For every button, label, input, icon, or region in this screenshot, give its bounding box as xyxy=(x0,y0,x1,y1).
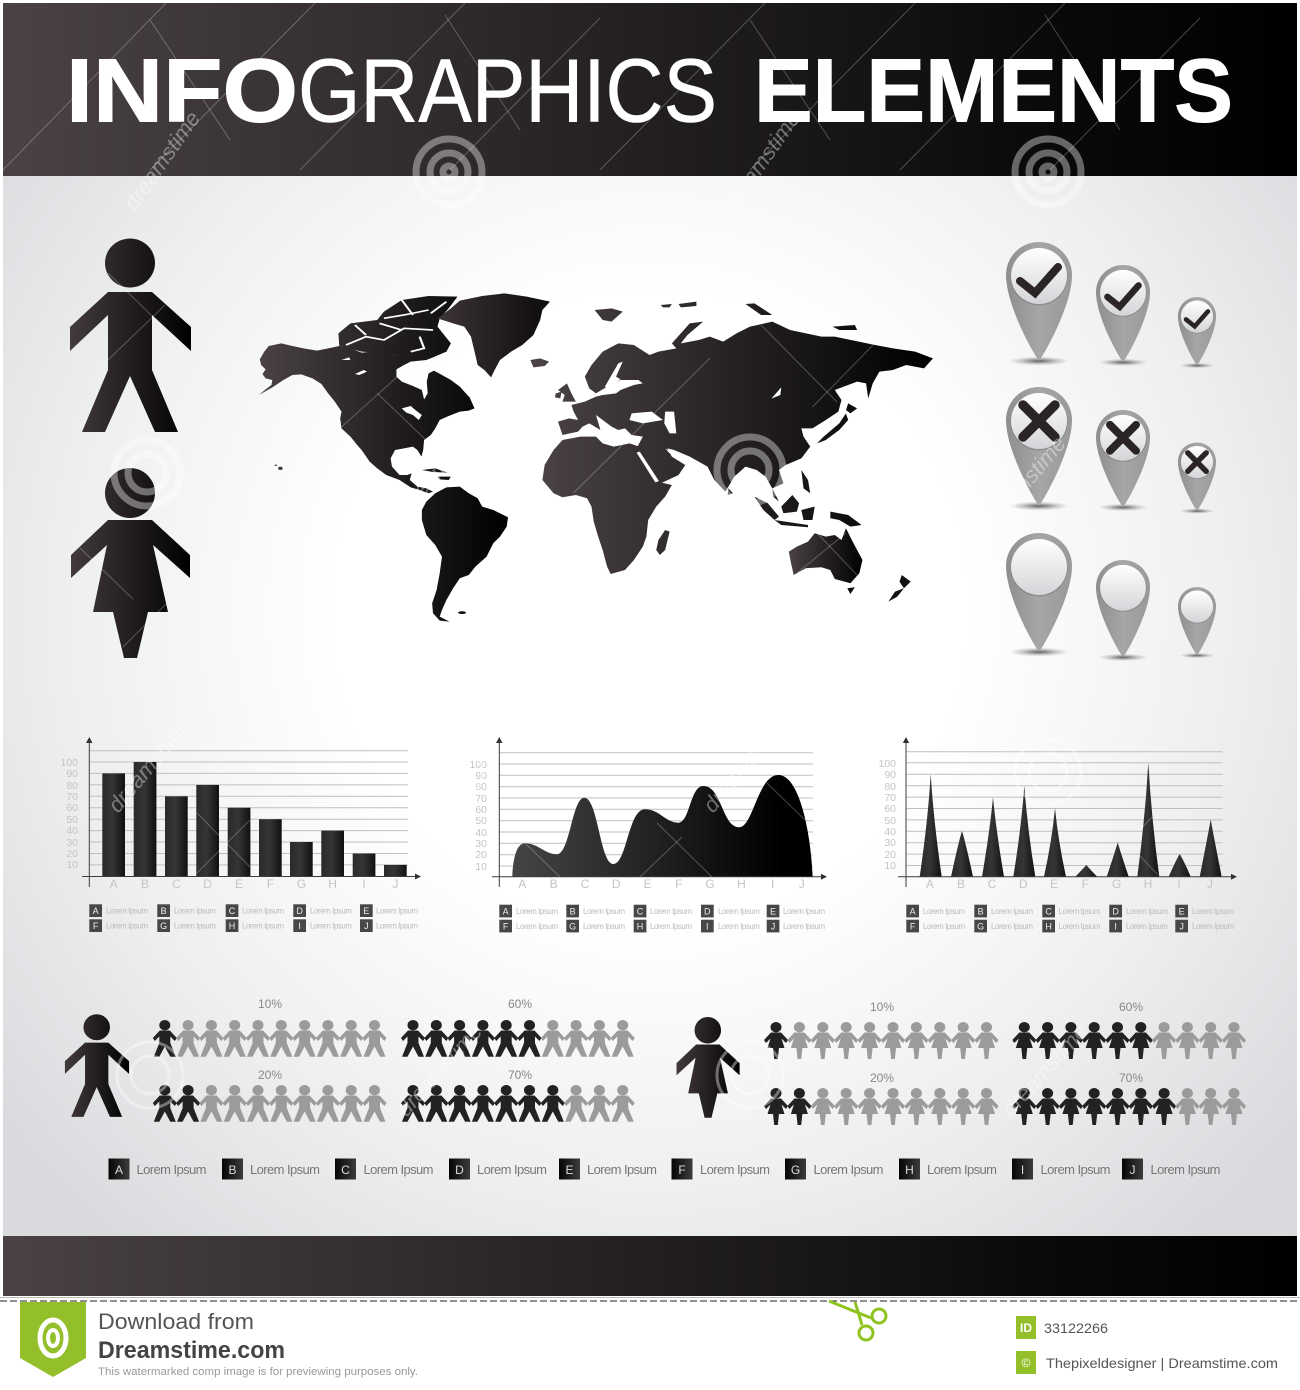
icon: small blank pin xyxy=(1178,587,1216,658)
x axis labels: C xyxy=(988,877,997,891)
map pins: check row xyxy=(1006,242,1216,368)
y axis labels: 30 xyxy=(66,837,78,849)
bars xyxy=(102,762,407,876)
x axis labels: E xyxy=(643,877,652,891)
image author xyxy=(1016,1351,1278,1374)
x axis labels: B xyxy=(141,877,149,891)
chart legend: Lorem Ipsum xyxy=(1192,922,1234,931)
chart legend: Lorem Ipsum xyxy=(516,907,558,916)
y axis labels: 40 xyxy=(475,827,487,839)
y axis labels: 50 xyxy=(884,815,896,827)
chart legend: Lorem Ipsum xyxy=(991,907,1033,916)
chart legend: Lorem Ipsum xyxy=(516,922,558,931)
world map xyxy=(259,293,933,622)
chart legend: F xyxy=(910,922,916,932)
axes xyxy=(492,737,827,887)
x axis labels: H xyxy=(737,877,746,891)
footer download text xyxy=(98,1309,418,1378)
x axis labels: E xyxy=(235,877,243,891)
chart legend: F xyxy=(503,922,509,932)
people row: men 20% xyxy=(153,1068,386,1122)
bottom legend xyxy=(108,1158,1220,1180)
icon: large check pin xyxy=(1006,242,1072,366)
chart legend: E xyxy=(770,906,776,916)
watermark diagonal lines xyxy=(3,3,1200,877)
x axis labels: B xyxy=(957,877,965,891)
x axis labels: D xyxy=(612,877,621,891)
y axis labels xyxy=(60,757,78,871)
chart legend: C xyxy=(637,906,644,916)
bottom legend: Lorem Ipsum xyxy=(250,1162,320,1177)
people row: women 10%: 10% xyxy=(870,1000,894,1014)
chart legend: Lorem Ipsum xyxy=(1192,907,1234,916)
image id xyxy=(1016,1316,1108,1339)
icon: large man xyxy=(70,238,191,432)
x axis labels xyxy=(518,877,805,891)
image id: ID xyxy=(1020,1321,1032,1335)
y axis labels: 20 xyxy=(475,849,487,861)
chart legend: Lorem Ipsum xyxy=(650,907,692,916)
chart legend: J xyxy=(364,921,369,931)
y axis labels: 60 xyxy=(475,804,487,816)
axes xyxy=(82,737,421,887)
y axis labels: 10 xyxy=(475,861,487,873)
icon: medium blank pin xyxy=(1096,560,1150,661)
canadian arctic channels xyxy=(346,300,446,352)
chart legend: Lorem Ipsum xyxy=(583,922,625,931)
x axis labels: A xyxy=(110,877,118,891)
bottom legend: G xyxy=(791,1163,800,1177)
chart legend: I xyxy=(298,921,301,931)
watermark spirals xyxy=(114,139,1081,1108)
chart legend: G xyxy=(977,922,984,932)
watermark text: dreamstime xyxy=(997,1019,1092,1121)
image id: 33122266 xyxy=(1044,1320,1108,1336)
axes xyxy=(898,737,1237,887)
chart legend: Lorem Ipsum xyxy=(106,906,148,916)
chart legend: I xyxy=(1114,922,1117,932)
chart legend: Lorem Ipsum xyxy=(174,906,216,916)
chart legend: H xyxy=(229,921,235,931)
bottom legend: B xyxy=(228,1163,237,1177)
y axis labels: 100 xyxy=(469,759,487,771)
bottom legend: Lorem Ipsum xyxy=(587,1162,657,1177)
chart legend xyxy=(906,905,1234,932)
chart legend: G xyxy=(160,921,167,931)
x axis labels: F xyxy=(267,877,274,891)
chart legend: D xyxy=(1112,906,1119,916)
y axis labels: 40 xyxy=(66,825,78,837)
y axis labels: 60 xyxy=(66,802,78,814)
chart legend: F xyxy=(93,921,99,931)
bottom legend: E xyxy=(565,1163,574,1177)
x axis labels: G xyxy=(1112,877,1121,891)
chart legend: Lorem Ipsum xyxy=(174,922,216,930)
chart legend: E xyxy=(1179,906,1185,916)
y axis labels: 80 xyxy=(66,780,78,792)
watermark text: dreamstime xyxy=(719,106,805,215)
icon: small cross pin xyxy=(1178,442,1216,514)
people row: men 60% xyxy=(401,997,635,1057)
chart legend: B xyxy=(161,906,167,916)
title: INFO xyxy=(66,42,298,142)
y axis labels: 10 xyxy=(884,860,896,872)
bottom legend: Lorem Ipsum xyxy=(814,1162,884,1177)
x axis labels: D xyxy=(1019,877,1028,891)
title: ELEMENTS xyxy=(754,42,1233,142)
chart legend: Lorem Ipsum xyxy=(242,906,284,916)
icon: large woman xyxy=(71,468,190,658)
footer download text: This watermarked comp image is for previewing purposes only. xyxy=(98,1366,418,1378)
y axis labels: 90 xyxy=(66,768,78,780)
x axis labels: J xyxy=(1207,877,1213,891)
y axis labels: 70 xyxy=(66,791,78,803)
image author: © xyxy=(1022,1356,1031,1370)
y axis labels: 20 xyxy=(884,849,896,861)
people row: men 10%: 10% xyxy=(258,997,282,1011)
bottom legend: Lorem Ipsum xyxy=(1150,1162,1220,1177)
chart legend: Lorem Ipsum xyxy=(1058,922,1101,931)
x axis labels: E xyxy=(1050,877,1058,891)
chart legend: B xyxy=(978,906,984,916)
chart legend: C xyxy=(1045,906,1052,916)
chart legend: Lorem Ipsum xyxy=(718,907,760,916)
y axis labels: 10 xyxy=(66,859,78,871)
chart legend: Lorem Ipsum xyxy=(376,922,418,930)
watermark text xyxy=(103,106,1092,1121)
bottom legend: Lorem Ipsum xyxy=(700,1162,770,1177)
chart legend: Lorem Ipsum xyxy=(783,907,825,916)
bottom legend: J xyxy=(1130,1163,1136,1177)
x axis labels: C xyxy=(172,877,181,891)
bottom legend: Lorem Ipsum xyxy=(1040,1162,1110,1177)
chart legend: Lorem Ipsum xyxy=(783,922,825,931)
bottom legend: Lorem Ipsum xyxy=(364,1162,434,1177)
bar chart xyxy=(60,737,421,932)
people row: men 60%: 60% xyxy=(508,997,532,1011)
people row: women 20%: 20% xyxy=(870,1071,894,1085)
x axis labels: I xyxy=(771,877,774,891)
y axis labels: 60 xyxy=(884,803,896,815)
people row: men 10% xyxy=(153,997,386,1057)
x axis labels: G xyxy=(297,877,306,891)
chart legend: Lorem Ipsum xyxy=(1126,922,1168,931)
icon: small check pin xyxy=(1178,297,1216,368)
spikes xyxy=(920,763,1222,877)
chart legend: J xyxy=(771,922,775,932)
x axis labels: I xyxy=(1177,877,1181,891)
icon: medium woman xyxy=(677,1017,740,1118)
chart legend: H xyxy=(1045,922,1052,932)
y axis labels: 100 xyxy=(878,758,896,770)
image author: Thepixeldesigner | Dreamstime.com xyxy=(1046,1355,1278,1371)
y axis labels: 100 xyxy=(60,757,78,769)
watermark text: dreamstime xyxy=(395,414,490,516)
x axis labels xyxy=(110,877,398,891)
bottom legend: D xyxy=(455,1163,464,1177)
chart legend: Lorem Ipsum xyxy=(1126,907,1168,916)
y axis labels: 20 xyxy=(66,848,78,860)
icon: greenland xyxy=(437,293,550,377)
chart legend: A xyxy=(910,906,916,916)
x axis labels: J xyxy=(799,877,805,891)
people row: women 10% xyxy=(764,1000,998,1059)
x axis labels: B xyxy=(550,877,558,891)
chart legend: A xyxy=(503,906,509,916)
chart legend: Lorem Ipsum xyxy=(923,922,965,931)
chart legend: Lorem Ipsum xyxy=(1058,907,1101,916)
chart legend: I xyxy=(706,922,709,932)
x axis labels: H xyxy=(328,877,337,891)
y axis labels: 80 xyxy=(475,781,487,793)
people row: women 70% xyxy=(1012,1071,1246,1125)
chart legend: A xyxy=(93,906,99,916)
chart legend: B xyxy=(570,906,576,916)
title: GRAPHICS xyxy=(298,42,717,142)
chart legend: Lorem Ipsum xyxy=(310,906,352,916)
chart legend: Lorem Ipsum xyxy=(242,922,284,930)
spike chart xyxy=(878,737,1237,932)
chart legend: E xyxy=(363,906,369,916)
x axis labels: A xyxy=(518,877,526,891)
y axis labels: 30 xyxy=(884,837,896,849)
x axis labels: C xyxy=(581,877,590,891)
watermark text: dreamstime xyxy=(392,1019,487,1121)
watermark text: dreamstime xyxy=(103,713,196,817)
y axis labels: 70 xyxy=(475,793,487,805)
y axis labels: 90 xyxy=(884,769,896,781)
chart legend: Lorem Ipsum xyxy=(718,922,760,931)
y axis labels: 30 xyxy=(475,838,487,850)
icon: large cross pin xyxy=(1006,387,1072,510)
x axis labels: A xyxy=(926,877,934,891)
cut line xyxy=(0,1298,1300,1301)
chart legend: Lorem Ipsum xyxy=(650,922,692,931)
y axis labels xyxy=(469,759,487,873)
y axis labels: 80 xyxy=(884,781,896,793)
y axis labels xyxy=(878,758,896,872)
map pins: cross row xyxy=(1006,387,1216,514)
chart legend: D xyxy=(296,906,303,916)
chart legend: H xyxy=(637,922,643,932)
watermark text: dreamstime xyxy=(119,106,205,215)
x axis labels: J xyxy=(392,877,398,891)
bottom legend: I xyxy=(1021,1163,1024,1177)
chart legend: Lorem Ipsum xyxy=(376,906,418,916)
footer download text: Download from xyxy=(98,1309,254,1334)
chart legend: Lorem Ipsum xyxy=(583,907,625,916)
x axis labels: G xyxy=(705,877,715,891)
area chart xyxy=(469,737,827,932)
icon: medium check pin xyxy=(1096,265,1150,366)
chart legend: D xyxy=(704,906,711,916)
people row: men 70%: 70% xyxy=(508,1068,532,1082)
icon: large blank pin xyxy=(1006,533,1072,656)
people row: men 70% xyxy=(401,1068,635,1122)
chart legend: Lorem Ipsum xyxy=(310,922,352,930)
y axis labels: 40 xyxy=(884,826,896,838)
bottom legend: F xyxy=(678,1163,686,1177)
bottom legend: C xyxy=(341,1163,350,1177)
map pins: blank row xyxy=(1006,533,1216,661)
chart legend: Lorem Ipsum xyxy=(991,922,1033,931)
bottom legend: Lorem Ipsum xyxy=(477,1162,547,1177)
x axis labels: H xyxy=(1144,877,1152,891)
chart legend xyxy=(89,904,418,932)
people row: women 20% xyxy=(764,1071,998,1125)
area shape xyxy=(512,775,813,877)
chart legend: J xyxy=(1179,922,1184,932)
chart legend: Lorem Ipsum xyxy=(106,922,148,930)
bottom legend: H xyxy=(905,1163,914,1177)
chart legend: Lorem Ipsum xyxy=(923,907,965,916)
footer download text: Dreamstime.com xyxy=(98,1337,285,1364)
x axis labels: F xyxy=(1082,877,1089,891)
bottom legend: Lorem Ipsum xyxy=(136,1162,206,1177)
people row: women 70%: 70% xyxy=(1119,1071,1143,1085)
chart legend: G xyxy=(569,922,576,932)
x axis labels xyxy=(926,877,1213,891)
y axis labels: 50 xyxy=(66,814,78,826)
x axis labels: I xyxy=(362,877,366,891)
y axis labels: 50 xyxy=(475,815,487,827)
icon: medium cross pin xyxy=(1096,410,1150,511)
watermark text: dreamstime xyxy=(978,431,1071,535)
y axis labels: 70 xyxy=(884,792,896,804)
icon: scissors xyxy=(829,1301,886,1340)
bottom legend: Lorem Ipsum xyxy=(927,1162,997,1177)
chart legend: C xyxy=(229,906,236,916)
icon: dreamstime logo xyxy=(20,1302,86,1377)
people row: women 60%: 60% xyxy=(1119,1000,1143,1014)
watermark text: dreamstime xyxy=(698,713,791,817)
people row: men 20%: 20% xyxy=(258,1068,282,1082)
title xyxy=(66,42,1233,142)
people row: women 60% xyxy=(1012,1000,1246,1059)
header bar xyxy=(3,3,1297,176)
x axis labels: F xyxy=(675,877,682,891)
x axis labels: D xyxy=(203,877,212,891)
icon: medium man xyxy=(65,1014,129,1117)
chart legend xyxy=(499,905,825,932)
bottom legend: A xyxy=(115,1163,123,1177)
footer bar xyxy=(3,1236,1297,1296)
y axis labels: 90 xyxy=(475,770,487,782)
